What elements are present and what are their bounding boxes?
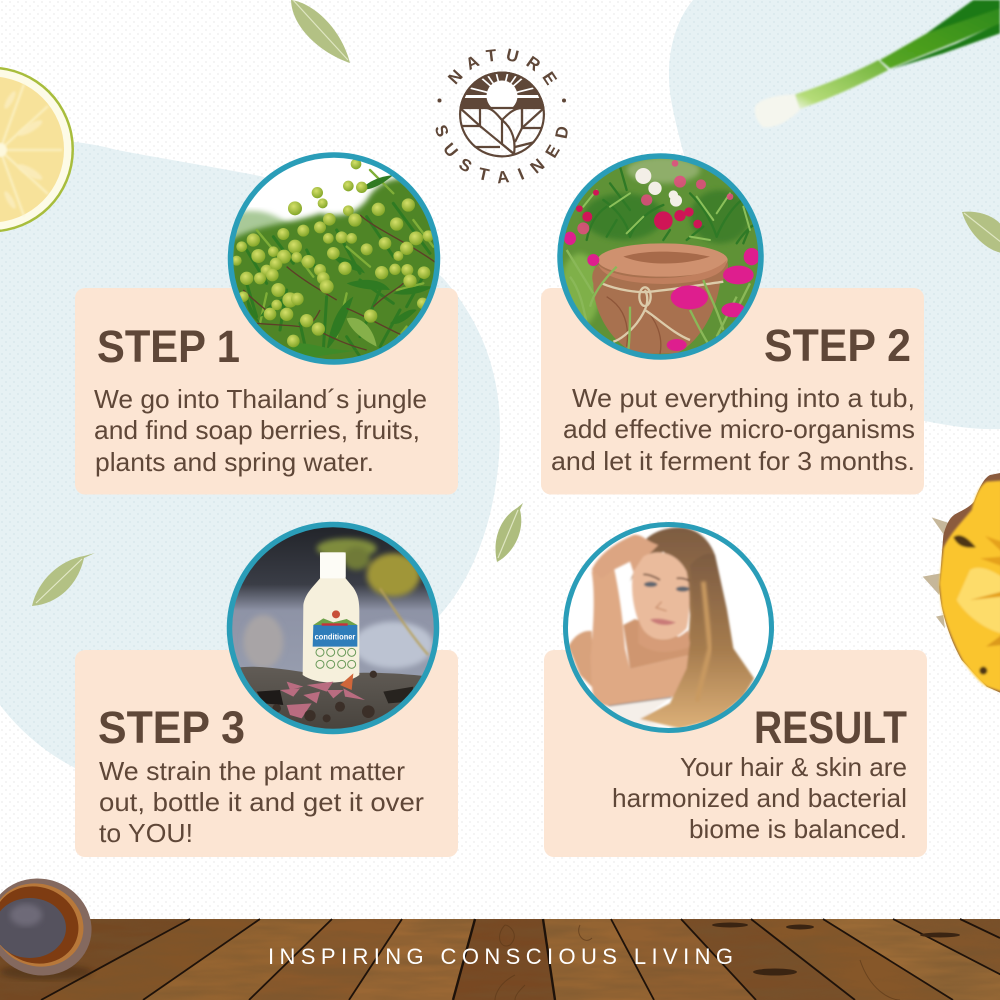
text: step 1 description: We go into Thailand´s jungle bbox=[94, 384, 427, 414]
photo: fermenting pot among flowers bbox=[557, 150, 770, 363]
photo: woman with long hair bbox=[564, 524, 772, 732]
text: step 1 description: plants and spring water. bbox=[95, 447, 374, 477]
icon: pineapple slice bbox=[923, 473, 1000, 693]
text: step 3 description bbox=[99, 756, 424, 848]
logo text: SUSTAINED: SUSTAINED bbox=[436, 125, 568, 184]
text: step 1 description bbox=[94, 384, 427, 477]
panel: step 1 bbox=[75, 154, 458, 494]
photo: conditioner bottle bbox=[220, 518, 447, 738]
icon: leaf left bbox=[32, 553, 95, 606]
text: result description: Your hair & skin are bbox=[680, 752, 907, 782]
text: step 3 description: We strain the plant matter bbox=[99, 756, 405, 786]
icon: longan fruit bbox=[0, 864, 105, 990]
text: result description: harmonized and bacterial bbox=[612, 783, 907, 813]
icon: leaf right bbox=[962, 212, 1000, 253]
photo: soap berries bbox=[227, 154, 443, 370]
footer: wood floor bbox=[0, 919, 1000, 1000]
logo emblem bbox=[459, 72, 545, 158]
tagline: INSPIRING CONSCIOUS LIVING bbox=[268, 944, 733, 969]
logo: Nature Sustained bbox=[436, 48, 568, 184]
text: step 2 description: and let it ferment for 3 months. bbox=[551, 446, 915, 476]
blob: right pale blue bbox=[669, 0, 1000, 429]
photo: conditioner bottle: conditioner bbox=[315, 632, 355, 641]
heading: step 2: STEP 2 bbox=[764, 320, 911, 371]
panel: step 3 bbox=[75, 518, 458, 857]
panel: result bbox=[544, 524, 927, 857]
icon: spring onion bbox=[755, 0, 1000, 127]
blob: left pale blue bbox=[0, 139, 500, 771]
text: step 2 description: We put everything into a tub, bbox=[572, 383, 915, 413]
text: result description: biome is balanced. bbox=[689, 814, 907, 844]
logo text: NATURE: NATURE bbox=[448, 48, 558, 86]
icon: leaf center bbox=[496, 503, 523, 562]
icon: leaf top bbox=[291, 0, 350, 63]
text: step 1 description: and find soap berries, fruits, bbox=[94, 415, 420, 445]
panel: step 2 bbox=[541, 150, 924, 494]
heading: step 1: STEP 1 bbox=[97, 321, 240, 372]
text: step 3 description: to YOU! bbox=[99, 818, 193, 848]
text: step 2 description bbox=[551, 383, 915, 476]
heading: result: RESULT bbox=[754, 702, 907, 753]
icon: lemon slice bbox=[0, 66, 74, 232]
heading: step 3: STEP 3 bbox=[98, 702, 245, 753]
text: step 2 description: add effective micro-organisms bbox=[563, 414, 915, 444]
text: step 3 description: out, bottle it and get it over bbox=[99, 787, 424, 817]
text: result description bbox=[612, 752, 907, 844]
